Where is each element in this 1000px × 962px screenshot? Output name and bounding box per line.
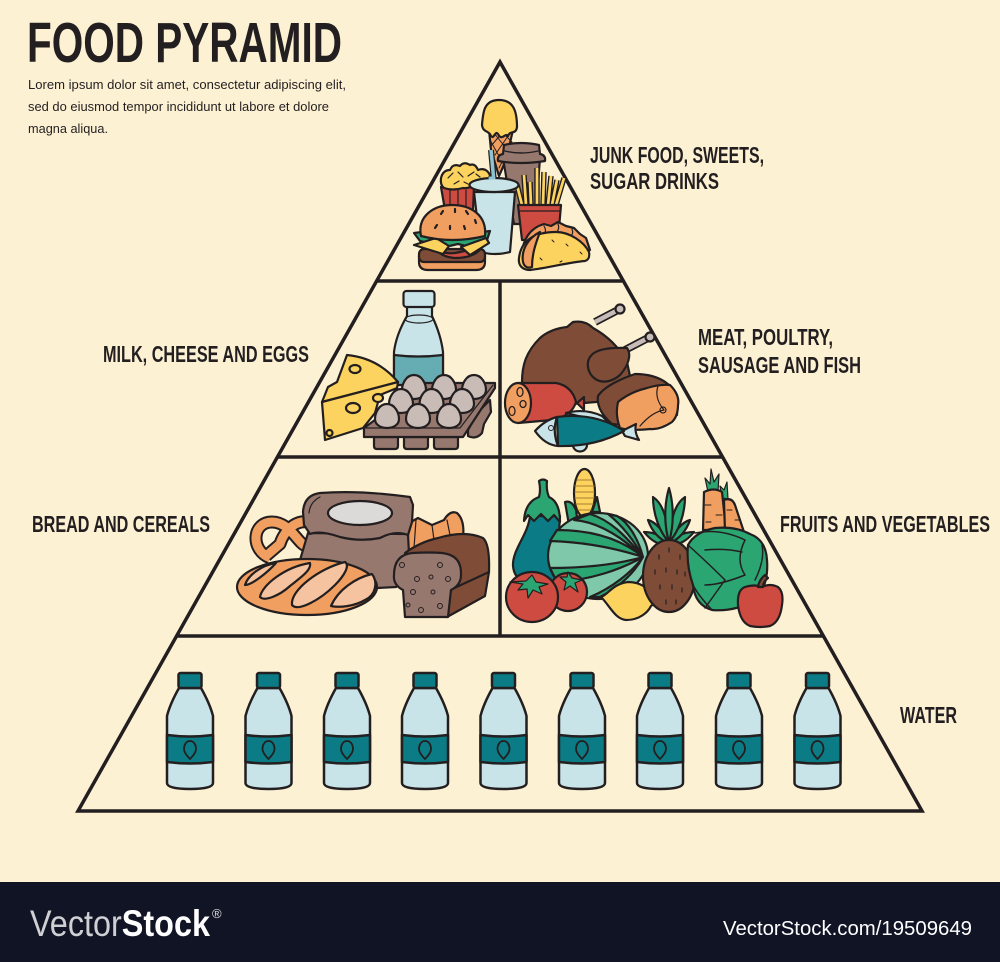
icon: coffee cup: [498, 143, 545, 224]
intro text block: magna aliqua.: [28, 122, 108, 136]
icon: croissant: [407, 512, 463, 560]
icon: ham: [598, 374, 678, 430]
food group: junk food: [414, 100, 590, 270]
icon: popcorn bucket: [441, 163, 490, 210]
label: dairy: MILK, CHEESE AND EGGS: [103, 341, 309, 367]
label: junk food: [590, 142, 764, 194]
icon: eggplant: [513, 480, 560, 582]
icon: ice cream: [482, 100, 517, 176]
egg middle row 1: [389, 389, 413, 413]
icon: salami: [505, 383, 584, 423]
intro text block: [28, 78, 346, 136]
icon: burger: [414, 205, 490, 270]
icon: water bottle 4: [402, 673, 448, 789]
egg back row 3: [462, 375, 486, 399]
footer image id: VectorStock.com/19509649: [723, 918, 972, 940]
egg front row 1: [375, 404, 399, 428]
egg front row 2: [406, 404, 430, 428]
icon: milk bottle: [394, 291, 443, 385]
footer bar: [0, 882, 1000, 962]
icon: taco: [519, 222, 590, 270]
icon: water bottle 8: [716, 673, 762, 789]
icon: baguette: [237, 559, 377, 615]
icon: apple: [738, 575, 782, 627]
label: water: WATER: [900, 702, 957, 728]
icon: bread loaf: [394, 534, 489, 617]
icon: french fries: [517, 168, 564, 240]
icon: water bottle 3: [324, 673, 370, 789]
icon: tomatoes: [506, 572, 587, 622]
label: junk food: JUNK FOOD, SWEETS,: [590, 142, 764, 168]
intro text block: sed do eiusmod tempor incididunt ut labore et dolore: [28, 100, 329, 114]
icon: egg tray: [364, 375, 495, 449]
icon: water bottle 2: [246, 673, 292, 789]
intro text block: Lorem ipsum dolor sit amet, consectetur adipiscing elit,: [28, 78, 346, 92]
icon: corn: [565, 469, 600, 525]
icon: pretzel: [256, 522, 316, 558]
label: meat: SAUSAGE AND FISH: [698, 352, 861, 378]
icon: fish: [535, 411, 639, 452]
pyramid outline: [78, 62, 922, 811]
icon: watermelon: [548, 513, 648, 599]
label: meat: [698, 324, 861, 378]
icon: soft drink cup: [470, 150, 518, 254]
egg middle row 2: [420, 389, 444, 413]
icon: water bottle 9: [794, 673, 840, 789]
title: FOOD PYRAMID: [27, 11, 342, 75]
label: meat: MEAT, POULTRY,: [698, 324, 833, 350]
food group: meat: [505, 304, 678, 452]
icon: water bottle 7: [637, 673, 683, 789]
icon: roast turkey: [522, 304, 654, 405]
icon: pineapple: [643, 488, 695, 612]
egg middle row 3: [450, 389, 474, 413]
label: bread: BREAD AND CEREALS: [32, 511, 210, 537]
icon: flour sack: [300, 492, 413, 590]
icon: water bottle 6: [559, 673, 605, 789]
icon: water bottle 5: [480, 673, 526, 789]
icon: lemon: [601, 582, 654, 620]
food group: bread and cereals: [237, 492, 489, 617]
icon: carrots: [703, 469, 745, 535]
label: junk food: SUGAR DRINKS: [590, 168, 719, 194]
food group: dairy: [322, 291, 495, 449]
icon: water bottle 1: [167, 673, 213, 789]
icon: cabbage: [688, 528, 767, 610]
registered mark: ®: [212, 906, 222, 921]
egg back row 2: [432, 375, 456, 399]
food group: fruits and vegetables: [506, 469, 782, 627]
row of water bottles: [167, 673, 840, 789]
egg front row 3: [437, 404, 461, 428]
footer logo: VectorStock: [30, 903, 210, 944]
egg back row 1: [402, 375, 426, 399]
icon: cheese: [322, 355, 398, 440]
